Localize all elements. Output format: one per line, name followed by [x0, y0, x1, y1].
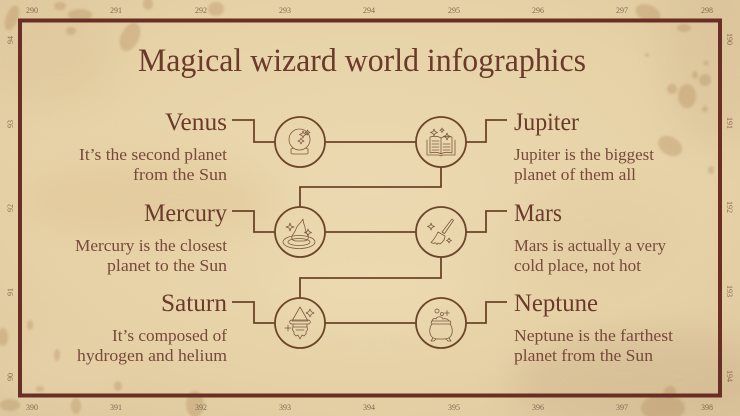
block: Jupiter — [514, 109, 654, 184]
map coordinates: 90 — [6, 373, 15, 381]
block: Neptune — [514, 290, 673, 365]
block: Venus: Venus — [165, 109, 227, 136]
map coordinates: 190 — [725, 33, 734, 45]
block: Mercury: Mercury — [144, 200, 227, 227]
map coordinates: 192 — [725, 201, 734, 213]
block: Saturn — [77, 290, 227, 365]
block: Venus — [79, 109, 228, 184]
block: Venus: It’s the second planet — [79, 145, 227, 164]
map coordinates: 293 — [279, 6, 291, 15]
block: Mercury — [75, 200, 228, 275]
map coordinates: 91 — [6, 288, 15, 296]
block: Mars: Mars — [514, 200, 562, 227]
block: Saturn: hydrogen and helium — [77, 346, 227, 365]
map coordinates: 391 — [110, 403, 122, 412]
icon: wizard with hat and beard — [275, 298, 325, 348]
icon: magic broom — [416, 207, 466, 257]
icon: spell book — [416, 117, 466, 167]
map coordinates: 194 — [725, 370, 734, 382]
icon: wizard hat melting — [275, 207, 325, 257]
block: Neptune: Neptune — [514, 290, 598, 317]
map coordinates: 92 — [6, 204, 15, 212]
map coordinates: 191 — [725, 117, 734, 129]
map coordinates: 395 — [448, 403, 460, 412]
block: Jupiter: Jupiter — [514, 109, 580, 136]
connector lines — [232, 120, 507, 323]
map coordinates: 290 — [26, 6, 38, 15]
map coordinates: 295 — [448, 6, 460, 15]
block: Mars: Mars is actually a very — [514, 236, 666, 255]
icon: crystal ball — [275, 117, 325, 167]
map coordinates: 294 — [363, 6, 375, 15]
map coordinates: 94 — [6, 36, 15, 44]
block: Jupiter: planet of them all — [514, 165, 636, 184]
map coordinates: 393 — [279, 403, 291, 412]
map coordinates: 292 — [195, 6, 207, 15]
map coordinates: 398 — [701, 403, 713, 412]
map coordinates: 397 — [616, 403, 628, 412]
map coordinates: 396 — [532, 403, 544, 412]
block: Mercury: Mercury is the closest — [75, 236, 227, 255]
block: Jupiter: Jupiter is the biggest — [514, 145, 654, 164]
block: Mars: cold place, not hot — [514, 256, 641, 275]
map coordinates: 392 — [195, 403, 207, 412]
block: Neptune: planet from the Sun — [514, 346, 654, 365]
icon: cauldron — [416, 298, 466, 348]
map coordinates: 93 — [6, 120, 15, 128]
map coordinates: 390 — [26, 403, 38, 412]
block: Saturn: Saturn — [161, 290, 227, 317]
map coordinates: 298 — [701, 6, 713, 15]
map coordinates: 297 — [616, 6, 628, 15]
block: Saturn: It’s composed of — [112, 326, 227, 345]
map coordinates: 193 — [725, 285, 734, 297]
map coordinates: 296 — [532, 6, 544, 15]
map coordinates: 394 — [363, 403, 375, 412]
title: Magical wizard world infographics — [138, 43, 586, 79]
block: Mercury: planet to the Sun — [107, 256, 228, 275]
map coordinates: 291 — [110, 6, 122, 15]
block: Venus: from the Sun — [133, 165, 228, 184]
block: Neptune: Neptune is the farthest — [514, 326, 673, 345]
block: Mars — [514, 200, 666, 275]
